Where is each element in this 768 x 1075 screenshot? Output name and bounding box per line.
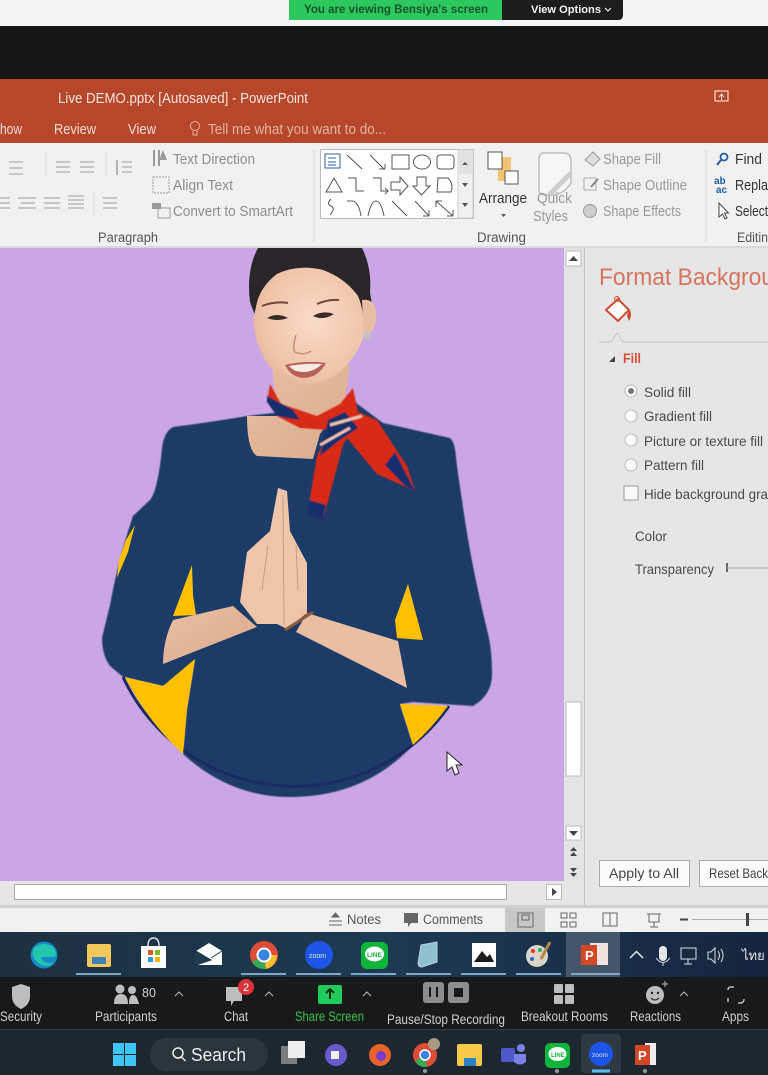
icon: store xyxy=(141,938,166,968)
left forearm xyxy=(163,606,257,664)
toolbar labels: Share Screen xyxy=(295,1009,364,1024)
circle backdrop edge xyxy=(123,677,449,786)
icon: powerpoint xyxy=(581,943,608,965)
icon: powerpoint: P xyxy=(585,948,594,963)
paragraph group: Text Direction xyxy=(173,152,255,168)
icon: security shield xyxy=(12,984,30,1009)
right forearm xyxy=(296,613,407,688)
editing tools: ab xyxy=(714,176,726,187)
search pill xyxy=(150,1038,268,1071)
scarf xyxy=(267,384,415,520)
system tray xyxy=(630,946,765,966)
icon: edge xyxy=(30,942,58,968)
pinned apps: P xyxy=(638,1048,647,1063)
icon: chrome xyxy=(250,941,278,969)
toolbar labels xyxy=(0,1009,749,1027)
icon: zoom: zoom xyxy=(309,953,326,960)
quick styles: Quick xyxy=(537,191,573,207)
powerpoint title bar: View xyxy=(128,122,156,138)
fill options xyxy=(624,384,768,577)
shape tools xyxy=(477,152,687,245)
fill section: Fill xyxy=(623,351,641,366)
photo: woman in navy dress with wai gesture xyxy=(102,248,492,797)
quick styles xyxy=(533,153,573,225)
icon: pause and stop recording xyxy=(423,982,469,1003)
icon: paint palette xyxy=(526,942,550,967)
fill options: Solid fill xyxy=(644,384,691,400)
icon: chat with badge xyxy=(226,979,254,1006)
ear xyxy=(362,300,376,334)
editing tools: ac xyxy=(716,185,728,196)
quick styles: Styles xyxy=(533,209,568,225)
toolbar labels: Security xyxy=(0,1009,42,1024)
icon: line: LINE xyxy=(367,952,382,959)
shape tools: Drawing xyxy=(477,230,526,245)
face xyxy=(254,268,364,385)
powerpoint title bar: Live DEMO.pptx [Autosaved] - PowerPoint xyxy=(58,90,309,107)
format background panel xyxy=(585,248,768,908)
icon: mail xyxy=(196,943,222,965)
powerpoint title bar xyxy=(0,79,768,143)
zoom share banner: You are viewing Bensiya's screen xyxy=(304,4,488,16)
neck and chest xyxy=(247,365,350,459)
fill options: Color xyxy=(635,528,667,544)
icon: notepad app xyxy=(418,942,437,967)
praying hands xyxy=(240,488,313,630)
zoom meeting toolbar xyxy=(0,977,768,1030)
shape tools: Shape Effects xyxy=(603,204,681,220)
icon: zoom xyxy=(305,941,333,969)
facial features xyxy=(262,300,371,378)
running app indicators xyxy=(76,973,620,975)
icon: start xyxy=(113,1043,136,1066)
icon: reactions xyxy=(646,981,668,1004)
toolbar labels: Reactions xyxy=(630,1009,681,1024)
status bar: Comments xyxy=(423,912,483,927)
system tray: ไทย xyxy=(741,948,765,963)
slide canvas xyxy=(0,248,564,881)
zoom share banner xyxy=(0,0,768,26)
fill options: Pattern fill xyxy=(644,457,704,473)
mouse cursor xyxy=(447,752,462,775)
panel buttons: Apply to All xyxy=(609,865,679,881)
search pill: Search xyxy=(191,1045,246,1065)
icon: breakout rooms xyxy=(554,984,574,1004)
paragraph group: Align Text xyxy=(173,178,233,194)
arrange tool: Arrange xyxy=(479,191,527,207)
icon: photos xyxy=(472,943,496,967)
icon: line xyxy=(361,942,388,969)
toolbar labels: Breakout Rooms xyxy=(521,1009,608,1024)
zoom share banner: View Options xyxy=(531,4,601,16)
paragraph group: Paragraph xyxy=(98,230,158,245)
paragraph group: Convert to SmartArt xyxy=(173,204,293,220)
icon: paint bucket xyxy=(606,296,631,321)
black band xyxy=(0,26,768,79)
powerpoint title bar: how xyxy=(0,122,22,138)
pinned apps: LINE xyxy=(551,1053,565,1059)
editing tools: Find xyxy=(735,152,762,168)
status bar: Notes xyxy=(347,912,381,927)
fill options: Picture or texture fill xyxy=(644,433,763,449)
shape tools: Shape Fill xyxy=(603,152,661,168)
toolbar labels: Pause/Stop Recording xyxy=(387,1012,505,1027)
toolbar carets xyxy=(175,992,688,996)
icon: chat with badge: 2 xyxy=(243,982,249,994)
yellow backdrop gaps xyxy=(117,525,448,754)
icon: participants xyxy=(114,984,156,1004)
icon: file explorer xyxy=(87,944,111,967)
windows taskbar with app icons xyxy=(0,932,768,977)
ribbon xyxy=(0,143,768,248)
icon: share screen xyxy=(318,985,342,1004)
navy dress silhouette xyxy=(102,400,492,797)
editing tools xyxy=(714,152,768,245)
vertical scrollbar xyxy=(564,248,585,906)
fill options: Transparency xyxy=(635,561,714,577)
toolbar labels: Apps xyxy=(722,1009,749,1024)
panel buttons xyxy=(600,860,768,886)
status bar xyxy=(0,908,768,932)
icon: apps xyxy=(728,987,744,1003)
powerpoint title bar: Tell me what you want to do... xyxy=(208,122,386,138)
toolbar labels: Participants xyxy=(95,1009,157,1024)
windows 11 taskbar xyxy=(0,1030,768,1075)
arrange tool xyxy=(479,152,527,217)
horizontal scrollbar xyxy=(0,881,584,906)
powerpoint title bar: Review xyxy=(54,122,96,138)
pinned apps: zoom xyxy=(592,1052,608,1059)
icon: participants: 80 xyxy=(142,986,156,1000)
hair xyxy=(249,248,374,318)
paragraph group xyxy=(0,150,293,245)
fill section xyxy=(609,351,641,366)
toolbar labels: Chat xyxy=(224,1009,248,1024)
shape gallery xyxy=(320,150,474,218)
shape tools: Shape Outline xyxy=(603,178,687,194)
fill options: Gradient fill xyxy=(644,408,712,424)
pinned apps xyxy=(281,1034,656,1073)
